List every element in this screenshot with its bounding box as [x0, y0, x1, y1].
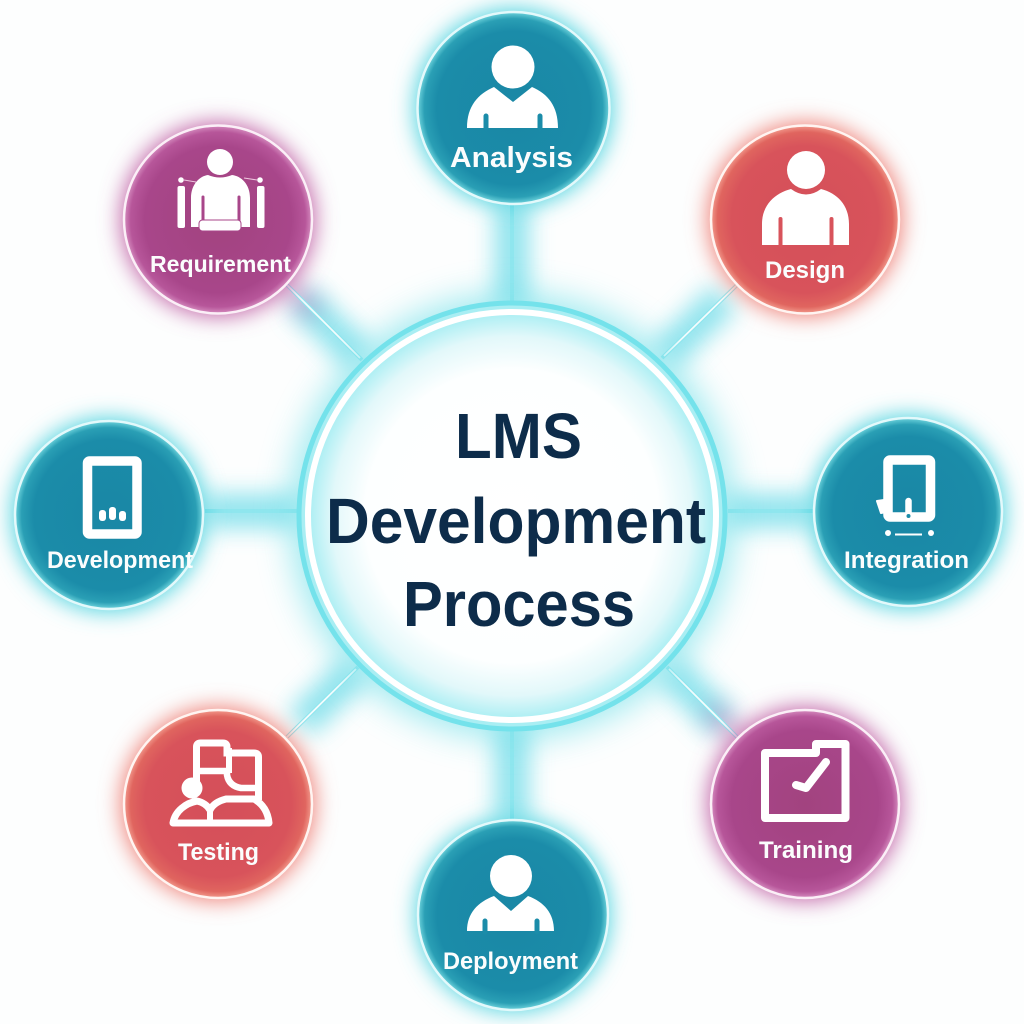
label: Requirement: Requirement: [150, 251, 291, 277]
label: Design: Design: [765, 257, 845, 284]
icon: person: [762, 151, 849, 246]
icon: folder with checkmark: [765, 744, 846, 818]
label: Deployment: Deployment: [443, 948, 578, 975]
icon: person at desk: [178, 149, 264, 231]
node: Training: [708, 707, 902, 901]
node: Deployment: [416, 818, 610, 1012]
label: Testing: Testing: [178, 839, 259, 866]
title: Process: [403, 568, 635, 640]
icon: person: [467, 855, 554, 932]
icon: tablet with hand: [877, 460, 934, 536]
node: Requirement: [121, 122, 315, 316]
connector lines: [205, 200, 815, 825]
icon: testing blocks and person: [173, 743, 269, 824]
label: Training: Training: [759, 837, 853, 864]
icon: person: [467, 46, 558, 128]
node: Integration: [811, 415, 1005, 609]
title: Development: [326, 485, 706, 557]
title: [326, 400, 706, 640]
title: LMS: [455, 400, 582, 472]
node: Design: [708, 122, 902, 316]
label: Integration: Integration: [844, 547, 969, 574]
icon: tablet with bars: [88, 461, 137, 534]
node: Testing: [121, 707, 315, 901]
label: Analysis: Analysis: [450, 142, 573, 174]
central hub: [290, 294, 734, 738]
node: Analysis: [414, 9, 612, 207]
label: Development: Development: [47, 547, 193, 574]
node: Development: [12, 418, 206, 612]
